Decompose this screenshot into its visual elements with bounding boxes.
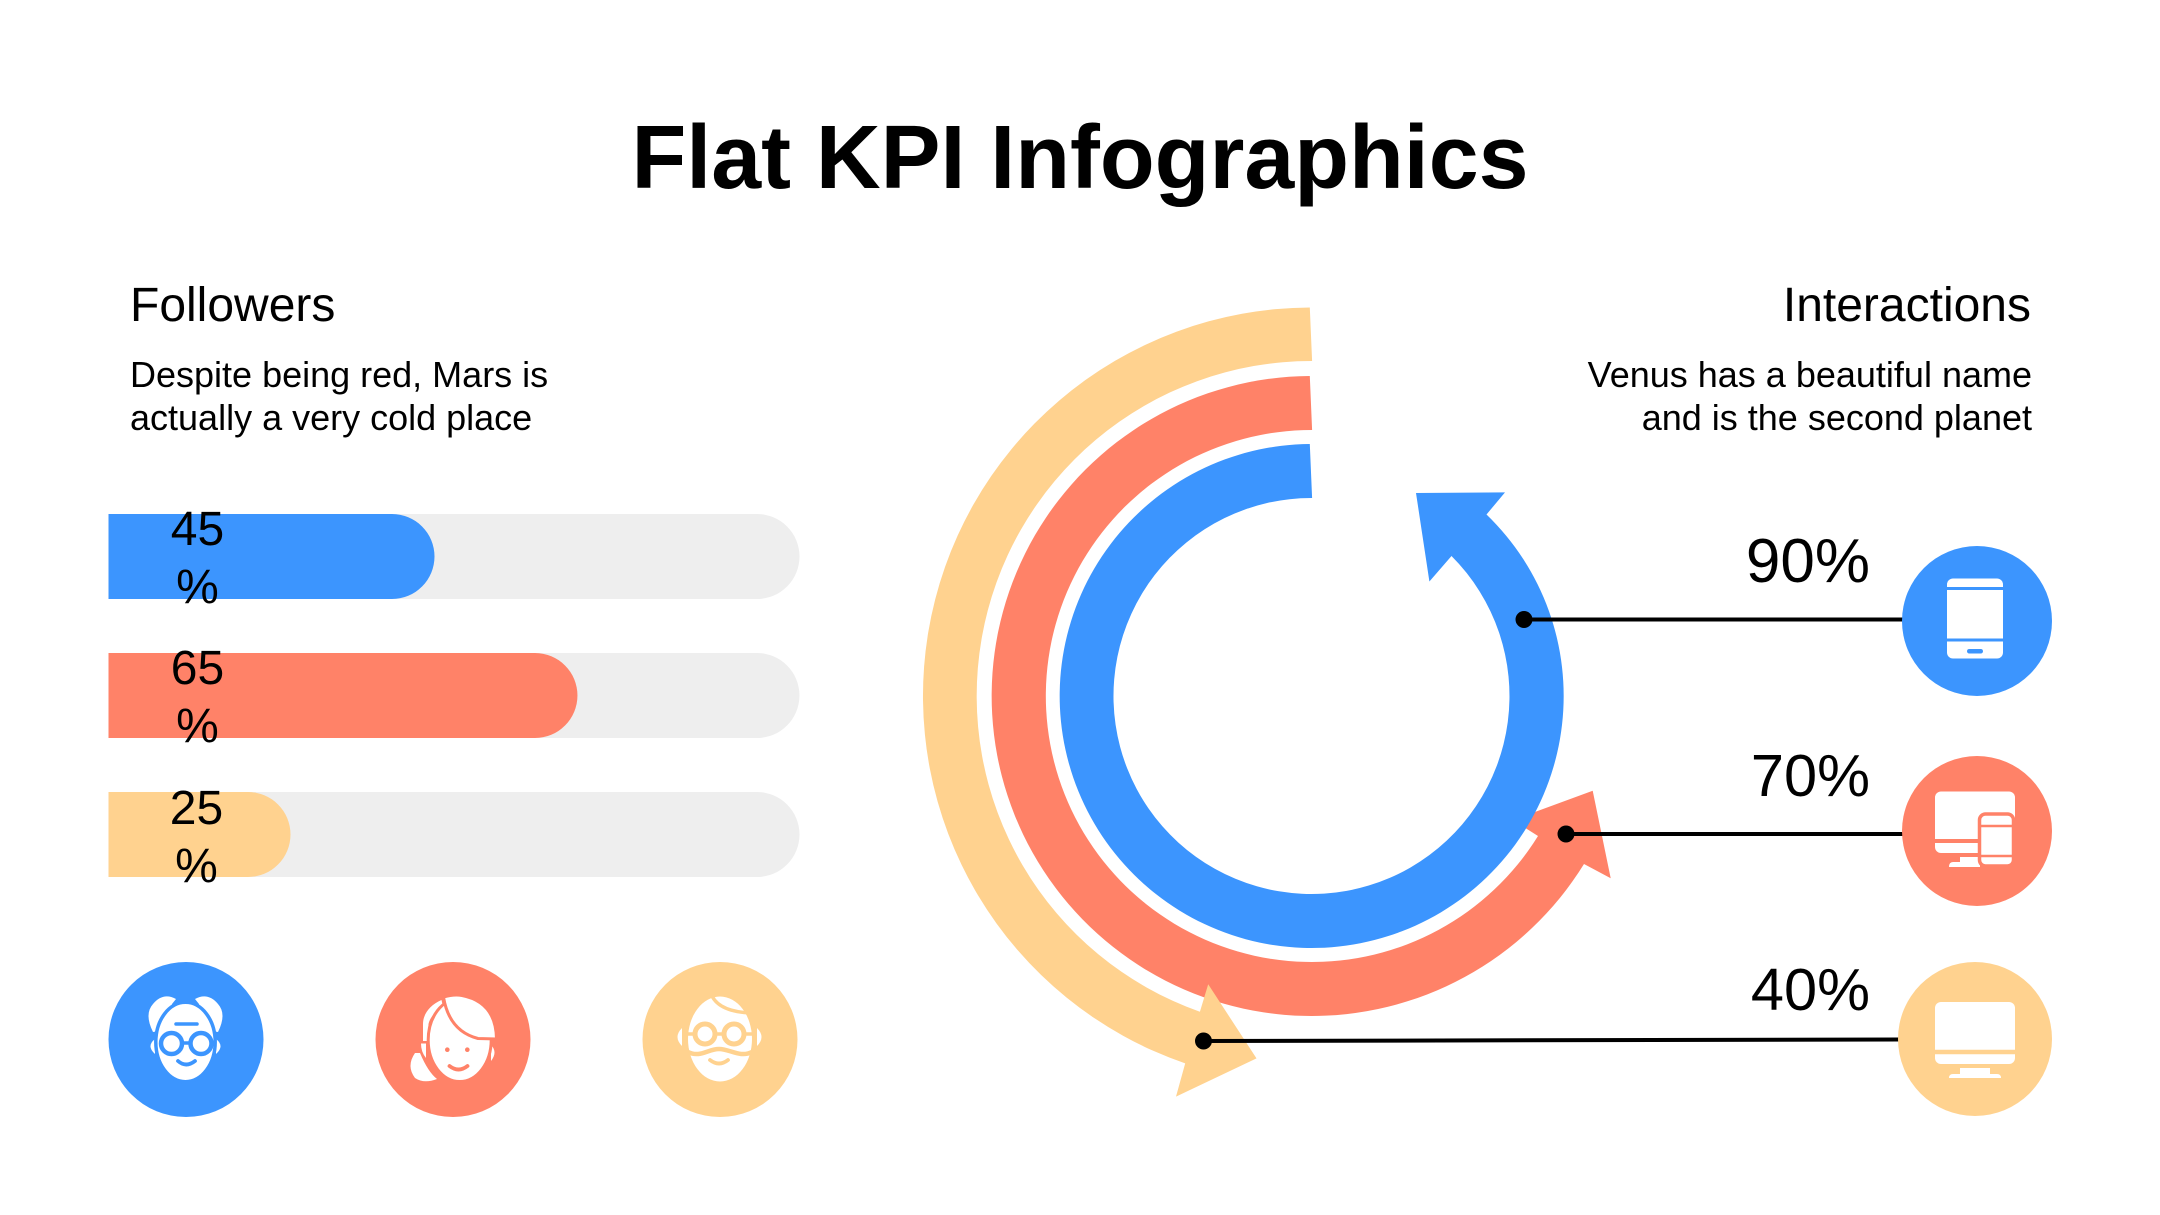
panel: interactions heading: Interactions bbox=[1783, 279, 2031, 332]
bar 25%: 25 bbox=[170, 782, 223, 835]
bar 25%: % bbox=[175, 840, 218, 893]
interactions description: and is the second planet bbox=[1642, 397, 2032, 438]
followers description: actually a very cold place bbox=[130, 397, 532, 438]
bar 65%: 65 bbox=[171, 642, 224, 695]
label 70%: 70% bbox=[1751, 742, 1870, 809]
connector: 90% bbox=[1516, 611, 1904, 628]
icon: tablet bbox=[1902, 546, 2052, 696]
red arc arrow 70% bbox=[992, 376, 1611, 1016]
yellow arc arrow 40% bbox=[923, 308, 1312, 1097]
bar 45%: 45 bbox=[171, 503, 224, 556]
connector: 70% bbox=[1558, 826, 1904, 842]
label 40%: 40% bbox=[1751, 956, 1870, 1023]
followers description bbox=[130, 354, 548, 438]
chart: concentric radial arrows bbox=[923, 308, 1611, 1097]
panel: followers heading: Followers bbox=[130, 279, 335, 332]
bar chart: followers bbox=[108, 503, 800, 893]
blue arc arrow 90% bbox=[1060, 444, 1564, 948]
label 90%: 90% bbox=[1746, 527, 1870, 596]
interactions description: Venus has a beautiful name bbox=[1588, 354, 2032, 395]
icon: bearded man bbox=[642, 962, 798, 1117]
followers description: Despite being red, Mars is bbox=[130, 354, 548, 395]
connector: 40% bbox=[1195, 1032, 1900, 1050]
icon: elderly man bbox=[108, 962, 264, 1117]
title: Flat KPI Infographics bbox=[632, 108, 1528, 208]
icon: desktop monitor bbox=[1898, 962, 2052, 1116]
bar 25% bbox=[108, 782, 800, 893]
icon: desktop and phone bbox=[1902, 756, 2052, 906]
bar 45% bbox=[108, 503, 800, 614]
interactions description bbox=[1588, 354, 2032, 438]
bar 45%: % bbox=[176, 561, 219, 614]
bar 65% bbox=[108, 642, 799, 753]
bar 65%: % bbox=[176, 700, 219, 753]
icon: woman bbox=[376, 962, 530, 1117]
